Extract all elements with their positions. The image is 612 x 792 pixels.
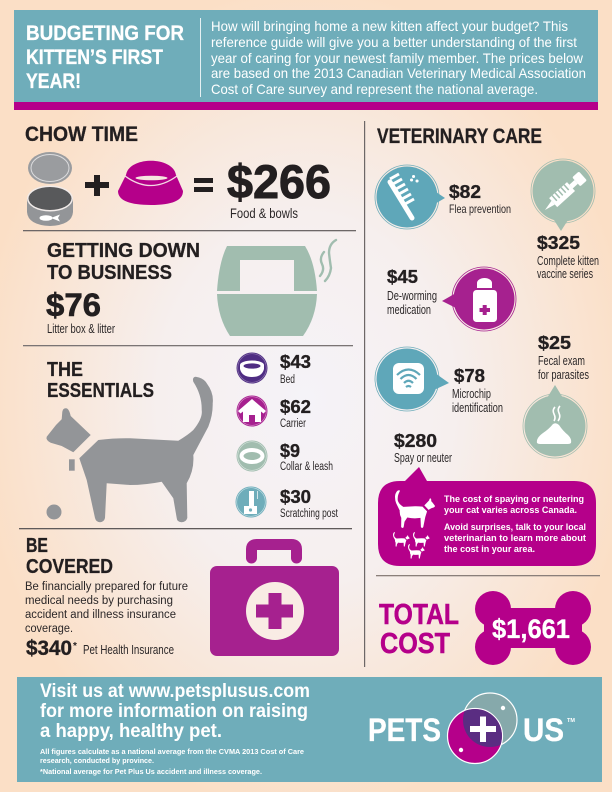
- item: spay or neuter: Spay or neuter: [394, 451, 452, 465]
- panel: chow time: [25, 123, 331, 226]
- heading: BE: [26, 535, 48, 557]
- price: insurance: [26, 637, 174, 660]
- heading: [47, 240, 200, 284]
- heading: ESSENTIALS: [47, 380, 154, 402]
- heading: [47, 359, 154, 402]
- item: scratching post: Scratching post: [280, 508, 339, 520]
- icon: cat: [46, 377, 213, 522]
- call to action: for more information on raising: [40, 701, 308, 722]
- panel: total cost: [379, 591, 591, 665]
- heading: [26, 535, 113, 578]
- insurance text: Be financially prepared for future: [25, 581, 188, 593]
- footnotes: *National average for Pet Plus Us accident and illness coverage.: [40, 769, 262, 776]
- logo: pets plus us: US: [523, 712, 564, 748]
- item: collar and leash: $9: [280, 440, 300, 461]
- heading: veterinary care: VETERINARY CARE: [377, 125, 542, 148]
- call to action: a happy, healthy pet.: [40, 721, 222, 742]
- intro text: year of caring for your newest family member. The prices below: [211, 50, 584, 66]
- header panel: [14, 10, 598, 110]
- icon: plus: [85, 175, 109, 196]
- title: YEAR!: [26, 70, 81, 93]
- icon: food bowl: [118, 161, 183, 205]
- item: carrier: [236, 396, 311, 430]
- price: insurance: $340: [26, 637, 72, 660]
- heading: total cost: TOTAL: [379, 599, 459, 631]
- item: flea prevention: [375, 165, 511, 229]
- price: litter: $76: [46, 287, 101, 323]
- icon: bone: [475, 591, 591, 665]
- total amount: $1,661: [492, 614, 570, 644]
- item: de-worming medication: [387, 266, 516, 331]
- insurance text: [25, 581, 188, 635]
- intro text: Cost of Care survey and represent the national average.: [211, 81, 538, 97]
- callout text: Avoid surprises, talk to your local: [444, 522, 586, 533]
- item: microchip: [375, 347, 503, 415]
- item: spay or neuter: $280: [394, 430, 437, 451]
- item: kitten vaccine: [531, 159, 599, 281]
- item: flea prevention: $82: [449, 181, 481, 202]
- item: scratching post: [236, 486, 339, 520]
- callout text: the cost in your area.: [444, 544, 535, 555]
- intro text: [211, 18, 586, 97]
- item: de-worming medication: $45: [387, 266, 418, 287]
- item: fecal exam: for parasites: [538, 368, 589, 382]
- intro text: How will bringing home a new kitten affect your budget? This: [211, 18, 568, 34]
- callout text: The cost of spaying or neutering: [444, 494, 584, 505]
- item: bed: [236, 351, 311, 386]
- insurance text: coverage.: [25, 623, 73, 635]
- callout text: veterinarian to learn more about: [444, 533, 587, 544]
- item: bed: Bed: [280, 374, 295, 386]
- item: fecal exam: Fecal exam: [538, 354, 585, 368]
- title: KITTEN’S FIRST: [26, 46, 163, 69]
- item: de-worming medication: medication: [387, 303, 431, 317]
- callout: spay or neuter cost: [378, 467, 596, 566]
- panel: veterinary care: [375, 125, 599, 566]
- label: litter: Litter box & litter: [47, 321, 115, 336]
- heading: GETTING DOWN: [47, 240, 200, 262]
- heading: THE: [47, 359, 83, 381]
- item: carrier: Carrier: [280, 418, 306, 430]
- item: de-worming medication: De-worming: [387, 289, 437, 303]
- item: microchip: Microchip: [452, 387, 491, 401]
- logo: pets plus us: [368, 693, 575, 764]
- panel: footer: [17, 677, 602, 782]
- call to action: [40, 681, 310, 742]
- item: microchip: $78: [454, 365, 485, 386]
- insurance text: medical needs by purchasing: [25, 595, 173, 607]
- item: microchip: identification: [452, 401, 503, 415]
- intro text: reference guide will give you a better understanding of the first: [211, 34, 577, 50]
- item: bed: $43: [280, 351, 311, 372]
- item: carrier: $62: [280, 396, 311, 417]
- title: [26, 22, 184, 93]
- price: insurance: Pet Health Insurance: [83, 642, 174, 657]
- call to action: Visit us at www.petsplusus.com: [40, 681, 310, 702]
- panel: getting down to business: [46, 240, 336, 336]
- icon: cat food can: [27, 152, 73, 226]
- heading: total cost: [379, 599, 459, 660]
- callout text: [444, 494, 587, 555]
- footnotes: All figures calculate as a national average from the CVMA 2013 Cost of Care: [40, 749, 304, 756]
- item: spay or neuter: [394, 430, 452, 465]
- label: food and bowls: Food & bowls: [230, 205, 298, 221]
- item: kitten vaccine: $325: [537, 232, 580, 253]
- callout text: your cat varies across Canada.: [444, 505, 577, 516]
- item: collar and leash: Collar & leash: [280, 461, 333, 473]
- footnotes: research, conducted by province.: [40, 758, 154, 765]
- item: collar and leash: [236, 440, 333, 473]
- item: fecal exam: [523, 332, 589, 458]
- logo: pets plus us: TM: [567, 718, 575, 724]
- panel: be covered: [25, 535, 339, 660]
- heading: TO BUSINESS: [47, 262, 172, 284]
- icon: equals: [194, 178, 213, 192]
- intro text: are based on the 2013 Canadian Veterinary Medical Association: [211, 65, 586, 81]
- footnotes: [40, 749, 304, 776]
- item: fecal exam: $25: [538, 332, 571, 353]
- icon: cat and kittens: [393, 490, 435, 559]
- price: food: $266: [227, 155, 331, 208]
- heading: total cost: COST: [380, 628, 450, 660]
- title: BUDGETING FOR: [26, 22, 184, 45]
- panel: the essentials: [46, 351, 339, 522]
- price: insurance: *: [73, 641, 77, 652]
- heading: COVERED: [26, 556, 113, 578]
- icon: litter box: [217, 240, 336, 336]
- insurance text: accident and illness insurance: [25, 609, 176, 621]
- icon: medical case: [210, 544, 339, 656]
- heading: chow time: CHOW TIME: [25, 123, 138, 146]
- logo: pets plus us: PETS: [368, 712, 441, 748]
- item: flea prevention: Flea prevention: [449, 202, 511, 216]
- item: scratching post: $30: [280, 486, 311, 507]
